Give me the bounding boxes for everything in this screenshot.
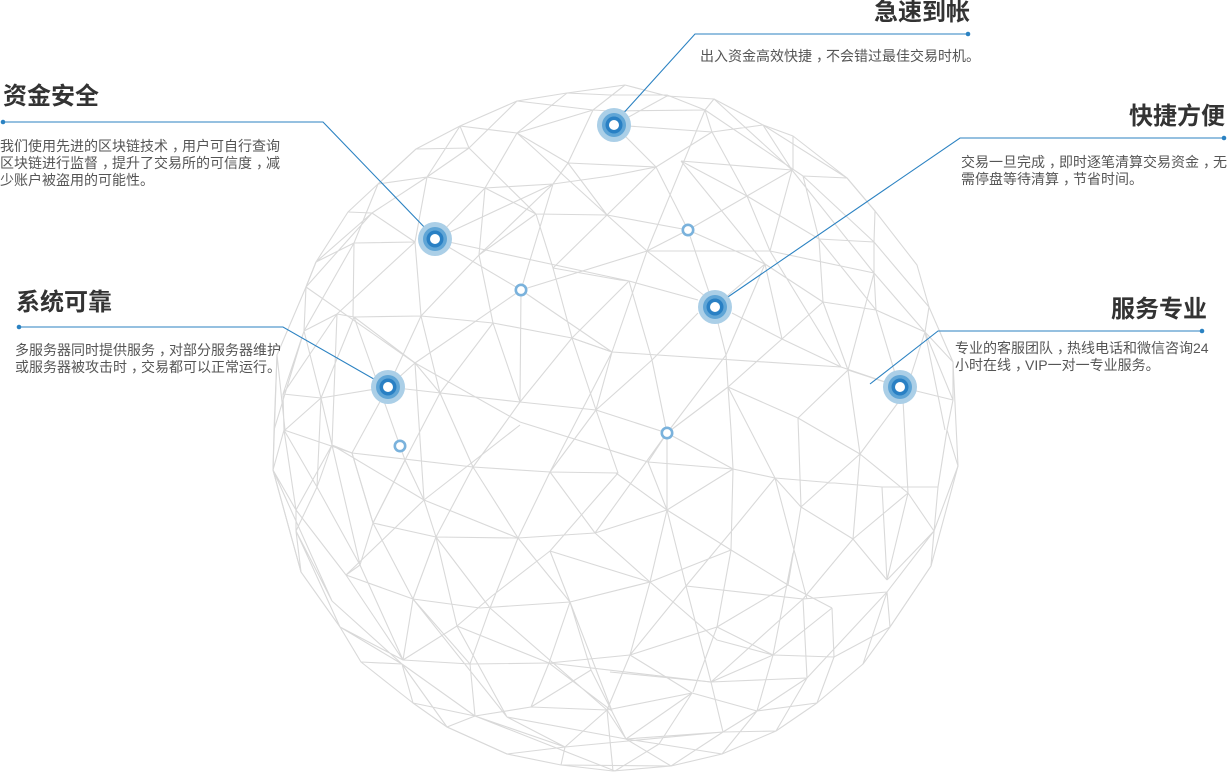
text block: 小时在线 ，VIP一对一专业服务。	[955, 357, 1160, 373]
small ring node	[516, 285, 526, 295]
panel: 系统可靠	[15, 289, 281, 375]
panel: 服务专业	[955, 296, 1209, 373]
small ring node	[662, 428, 672, 438]
text block: 多服务器同时提供服务 ，对部分服务器维护	[15, 342, 281, 358]
node: 急速到帐	[597, 108, 631, 142]
wireframe sphere mesh	[273, 85, 958, 771]
leader: 急速到帐	[620, 32, 970, 117]
small ring node	[395, 441, 405, 451]
text block: 少账户被盗用的可能性。	[0, 172, 154, 188]
small ring node	[683, 225, 693, 235]
text block	[15, 342, 281, 375]
leader end dot	[1200, 329, 1204, 333]
heading: 资金安全	[3, 83, 99, 110]
text block: 我们使用先进的区块链技术 ，用户可自行查询	[0, 138, 280, 154]
text block: 交易一旦完成 ，即时逐笔清算交易资金 ，无	[961, 154, 1227, 170]
leader end dot	[1222, 136, 1226, 140]
text block: 或服务器被攻击时 ，交易都可以正常运行。	[15, 359, 281, 375]
heading: 系统可靠	[16, 289, 112, 316]
leader end dot	[966, 32, 970, 36]
leader start dot	[17, 325, 21, 329]
panel: 快捷方便	[961, 103, 1227, 187]
text block: 区块链进行监督 ，提升了交易所的可信度 ，减	[0, 155, 280, 171]
text block	[955, 340, 1209, 373]
node: 资金安全	[418, 222, 452, 256]
leader: 系统可靠	[17, 325, 379, 382]
panel: 资金安全	[0, 83, 280, 188]
text block: 需停盘等待清算 ，节省时间。	[961, 171, 1143, 187]
node: 快捷方便	[698, 290, 732, 324]
text block: 出入资金高效快捷 ，不会错过最佳交易时机。	[700, 48, 980, 64]
text block	[0, 138, 280, 188]
text block	[961, 154, 1227, 187]
node: 系统可靠	[371, 370, 405, 404]
node: 服务专业	[883, 370, 917, 404]
leader: 资金安全	[1, 120, 428, 231]
leader: 快捷方便	[722, 136, 1226, 301]
heading: 快捷方便	[1129, 103, 1225, 130]
text block: 专业的客服团队 ，热线电话和微信咨询24	[955, 340, 1209, 356]
leader: 服务专业	[870, 329, 1204, 384]
heading: 服务专业	[1111, 296, 1207, 323]
leader start dot	[1, 120, 5, 124]
panel: 急速到帐	[700, 0, 980, 64]
